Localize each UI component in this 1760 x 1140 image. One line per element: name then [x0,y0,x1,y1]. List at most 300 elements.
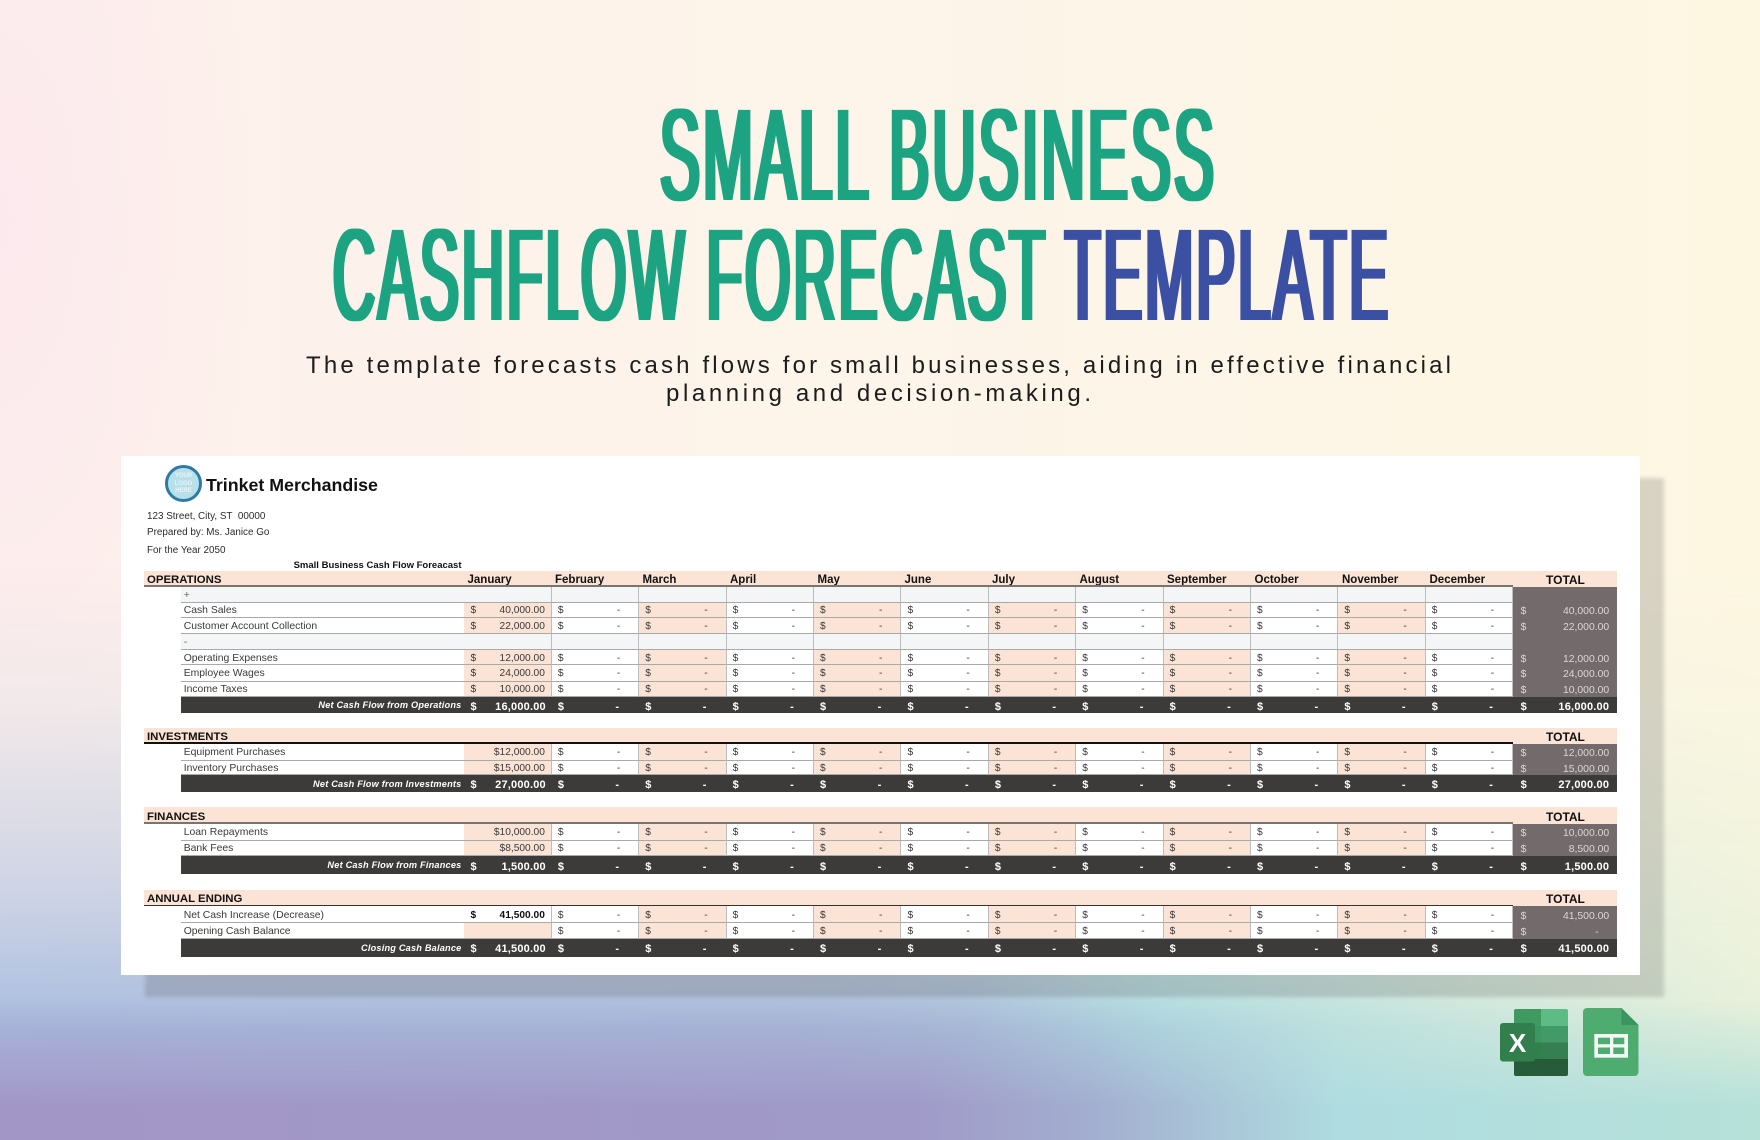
icon: excel: X [1509,1028,1527,1058]
row: income taxes: - [1403,684,1407,695]
icon: company logo: YOUR [175,473,192,479]
row: bank fees: $ [558,843,564,854]
row: income taxes: $ [558,684,564,695]
row: net cash flow from finances: $ [820,861,826,873]
operations header: November [1342,574,1398,586]
row: employee wages: $ [733,668,738,679]
row: inventory purchases: $ [1432,763,1437,774]
row: net cash flow from operations: $ [1082,701,1089,713]
row: closing cash balance: $ [1257,943,1263,955]
row: bank fees: - [1403,843,1407,854]
row: net cash flow from operations: - [1052,701,1056,713]
row: loan repayments: $10,000.00 [494,827,545,838]
investments header: INVESTMENTS [147,731,228,743]
row: net cash flow from finances: $ [1257,861,1263,873]
row: closing cash balance: $ [907,943,914,955]
row: loan repayments: - [792,827,795,838]
row: cash sales: Cash Sales [184,605,237,616]
row: operating expenses: - [617,653,620,664]
row: equipment purchases: $ [1432,747,1437,758]
row: bank fees: - [1054,843,1057,854]
row: equipment purchases: - [966,747,970,758]
row: bank fees: $ [1521,844,1526,855]
row: cash sales: $ [645,605,651,616]
row: net cash increase: - [1054,910,1057,921]
row: inventory purchases: Inventory Purchases [184,763,278,774]
icon: company logo: HERE [175,488,192,494]
row: equipment purchases: $ [1170,747,1175,758]
row: bank fees: $ [1432,843,1437,854]
row: operating expenses: $ [1432,653,1437,664]
row: loan repayments: $ [907,827,913,838]
row: opening cash balance: - [1491,926,1494,937]
row: closing cash balance: Closing Cash Balance [361,943,461,953]
operations header: September [1167,574,1226,586]
row: net cash flow from finances: - [1140,861,1144,873]
row: cash sales [181,603,1617,618]
row: net cash flow from operations: - [790,701,794,713]
row: net cash flow from finances: - [615,861,619,873]
row: loan repayments: $ [645,827,651,838]
row: inventory purchases: $15,000.00 [494,763,545,774]
row: net cash increase: $ [907,910,913,921]
row: cash sales: - [617,605,620,616]
row: net cash increase: 41,500.00 [1563,911,1609,922]
company name: Trinket Merchandise [206,475,378,495]
row: closing cash balance: $ [1521,943,1527,955]
row: opening cash balance: - [1054,926,1057,937]
row: inventory purchases: - [1054,763,1057,774]
row: cash sales: - [1316,605,1319,616]
row: net cash flow from investments: - [615,779,619,791]
row: opening cash balance: $ [1257,926,1263,937]
row: net cash flow from investments: $ [820,779,826,791]
row: loan repayments: $ [733,827,738,838]
panel: spreadsheet card [121,456,1640,975]
row: plus heading [181,587,1617,603]
row: net cash increase: - [1403,910,1407,921]
row: customer account collection: - [617,621,620,632]
finances header [144,807,1617,824]
row: income taxes: Income Taxes [184,684,248,695]
icon: google sheets [1583,1008,1638,1076]
row: net cash flow from operations: - [965,701,969,713]
row: net cash flow from finances: - [1052,861,1056,873]
row: loan repayments: - [1403,827,1407,838]
row: net cash increase: $ [1432,910,1437,921]
row: equipment purchases [181,744,1617,761]
row: cash sales: $ [995,605,1000,616]
row: income taxes: $ [1432,684,1437,695]
row: cash sales: $ [820,605,826,616]
row: inventory purchases: $ [820,763,826,774]
row: operating expenses: 12,000.00 [500,653,545,664]
row: cash sales: - [879,605,882,616]
row: income taxes: $ [1344,684,1350,695]
row: income taxes: $ [733,684,738,695]
row: bank fees: $ [907,843,913,854]
annual ending header: TOTAL [1546,892,1585,906]
row: minus heading [181,634,1617,650]
row: bank fees: - [792,843,795,854]
row: operating expenses: - [1491,653,1494,664]
row: customer account collection: $ [558,621,564,632]
row: net cash flow from investments: - [1402,779,1406,791]
row: closing cash balance: $ [995,943,1001,955]
row: customer account collection: - [966,621,970,632]
investments header: TOTAL [1546,730,1585,744]
row: opening cash balance: $ [907,926,913,937]
row: customer account collection: - [1491,621,1494,632]
row: opening cash balance: $ [645,926,651,937]
row: operating expenses: - [1403,653,1407,664]
row: employee wages: $ [1432,668,1437,679]
row: inventory purchases: - [1491,763,1494,774]
row: bank fees: 8,500.00 [1569,844,1609,855]
row: operating expenses: $ [470,653,476,664]
row: equipment purchases: - [1141,747,1145,758]
row: net cash increase: $ [1521,911,1526,922]
row: cash sales: - [1229,605,1232,616]
row: bank fees: $ [995,843,1000,854]
row: opening cash balance [181,923,1617,939]
row: income taxes: $ [1257,684,1263,695]
row: net cash flow from operations: Net Cash Flow from Operations [318,700,461,710]
row: bank fees: - [879,843,882,854]
row: net cash flow from investments: $ [1521,779,1527,791]
row: net cash flow from finances: $ [1432,861,1438,873]
row: inventory purchases: $ [907,763,913,774]
row: net cash flow from finances: $ [470,861,477,873]
row: operating expenses: - [1141,653,1145,664]
row: net cash flow from operations: $ [1344,701,1351,713]
row: net cash increase: - [792,910,795,921]
row: net cash flow from operations: 16,000.00 [1558,701,1609,713]
row: opening cash balance: - [1595,927,1599,938]
row: net cash increase: $ [1344,910,1350,921]
row: equipment purchases: $ [1257,747,1263,758]
row: net cash flow from finances: - [965,861,969,873]
row: net cash flow from investments: $ [907,779,914,791]
operations header: TOTAL [1546,573,1585,587]
operations header [144,571,1617,587]
row: income taxes [181,682,1617,697]
row: net cash flow from investments: - [790,779,794,791]
row: inventory purchases: - [1403,763,1407,774]
row: inventory purchases: $ [1257,763,1263,774]
row: cash sales: $ [1082,605,1088,616]
row: net cash flow from finances: - [878,861,881,873]
operations header: July [992,574,1015,586]
row: operating expenses: $ [820,653,826,664]
row: operating expenses: $ [1082,653,1088,664]
operations header: OPERATIONS [147,574,221,586]
row: operating expenses: $ [1170,653,1175,664]
address: 123 Street, City, ST 00000 [147,511,265,522]
annual ending header [144,890,1617,906]
row: inventory purchases: $ [1082,763,1088,774]
row: closing cash balance: $ [1170,943,1176,955]
row: bank fees: - [1229,843,1232,854]
row: equipment purchases: $ [1344,747,1350,758]
row: customer account collection: $ [470,621,476,632]
row: employee wages: - [966,668,970,679]
row: bank fees: $ [733,843,738,854]
row: net cash flow from operations: $ [820,701,826,713]
row: net cash flow from operations: $ [1257,701,1263,713]
row: cash sales: $ [907,605,913,616]
row: bank fees: - [1316,843,1319,854]
row: net cash flow from investments: $ [1170,779,1176,791]
row: net cash flow from finances: - [1489,861,1493,873]
row: closing cash balance: - [790,943,794,955]
row: operating expenses: $ [1257,653,1263,664]
row: net cash flow from investments: $ [1344,779,1351,791]
row: equipment purchases: - [879,747,882,758]
row: loan repayments: $ [820,827,826,838]
row: customer account collection: $ [820,621,826,632]
row: loan repayments: $ [1344,827,1350,838]
finances header: FINANCES [147,811,205,823]
row: opening cash balance: - [1403,926,1407,937]
row: customer account collection: $ [733,621,738,632]
row: loan repayments: 10,000.00 [1563,828,1609,839]
row: opening cash balance: - [1229,926,1232,937]
row: closing cash balance: $ [820,943,826,955]
row: employee wages [181,665,1617,682]
row: net cash flow from finances: $ [1521,861,1527,873]
row: cash sales: 40,000.00 [500,605,545,616]
row: closing cash balance: $ [470,943,477,955]
row: net cash flow from operations: $ [995,701,1001,713]
row: closing cash balance: - [703,943,707,955]
row: net cash flow from finances: $ [1344,861,1351,873]
row: operating expenses: - [1316,653,1319,664]
row: net cash flow from investments: $ [1257,779,1263,791]
row: closing cash balance: $ [558,943,564,955]
row: operating expenses [181,650,1617,665]
row: equipment purchases: 12,000.00 [1563,748,1609,759]
sheet title: Small Business Cash Flow Foreacast [294,560,462,571]
row: cash sales: - [1491,605,1494,616]
row: loan repayments: $ [558,827,564,838]
row: closing cash balance: 41,500.00 [495,943,546,955]
row: opening cash balance: $ [558,926,564,937]
row: inventory purchases: $ [1170,763,1175,774]
operations header: December [1430,574,1485,586]
row: net cash flow from investments: - [1227,779,1231,791]
operations header: May [818,574,840,586]
row: closing cash balance [181,939,1617,957]
row: closing cash balance: - [1227,943,1231,955]
row: income taxes: $ [1082,684,1088,695]
row: employee wages: - [879,668,882,679]
row: equipment purchases: - [792,747,795,758]
row: net cash flow from finances: 1,500.00 [501,861,546,873]
row: opening cash balance: - [1316,926,1319,937]
row: inventory purchases: - [792,763,795,774]
row: net cash flow from operations: $ [1521,701,1527,713]
row: customer account collection: $ [1344,621,1350,632]
row: net cash flow from operations: - [1315,701,1318,713]
row: operating expenses: - [704,653,708,664]
row: net cash flow from operations: $ [645,701,652,713]
prepared by: Prepared by: Ms. Janice Go [147,527,269,538]
row: employee wages: - [1316,668,1319,679]
row: net cash flow from investments: 27,000.00 [1558,779,1609,791]
row: equipment purchases: $ [820,747,826,758]
operations header: April [730,574,756,586]
row: bank fees: - [1141,843,1145,854]
row: customer account collection: - [1054,621,1057,632]
row: net cash flow from investments: $ [470,779,477,791]
row: employee wages: $ [1344,668,1350,679]
row: income taxes: - [879,684,882,695]
row: employee wages: $ [907,668,913,679]
row: net cash flow from finances: - [1402,861,1406,873]
row: customer account collection: $ [995,621,1000,632]
row: net cash increase: $ [1170,910,1175,921]
row: inventory purchases: $ [995,763,1000,774]
row: inventory purchases [181,761,1617,775]
row: loan repayments: - [1491,827,1494,838]
row: net cash flow from investments: $ [1082,779,1089,791]
row: inventory purchases: $ [1521,764,1526,775]
operations header: June [904,574,931,586]
row: income taxes: $ [995,684,1000,695]
row: customer account collection: - [879,621,882,632]
operations header: February [555,574,604,586]
row: operating expenses: 12,000.00 [1563,654,1609,665]
row: equipment purchases: $ [558,747,564,758]
row: income taxes: 10,000.00 [500,684,545,695]
row: bank fees: $ [1344,843,1350,854]
row: closing cash balance: $ [1082,943,1089,955]
finances header: TOTAL [1546,810,1585,824]
row: loan repayments: $ [1521,828,1526,839]
row: cash sales: $ [470,605,476,616]
year: For the Year 2050 [147,544,226,556]
row: opening cash balance: $ [995,926,1000,937]
row: loan repayments: $ [1170,827,1175,838]
row: income taxes: $ [470,684,476,695]
row: opening cash balance: $ [1344,926,1350,937]
row: net cash flow from investments: - [703,779,707,791]
row: customer account collection: $ [1432,621,1437,632]
row: bank fees: - [617,843,620,854]
row: employee wages: - [617,668,620,679]
row: equipment purchases: - [1229,747,1232,758]
row: loan repayments: - [966,827,970,838]
row: net cash flow from investments: - [965,779,969,791]
row: operating expenses: $ [733,653,738,664]
row: income taxes: $ [645,684,651,695]
row: net cash flow from investments: $ [995,779,1001,791]
row: net cash flow from finances [181,856,1617,874]
row: net cash flow from operations: - [1227,701,1231,713]
row: loan repayments [181,824,1617,841]
icon: company logo [165,465,202,502]
row: inventory purchases: $ [558,763,564,774]
row: inventory purchases: $ [733,763,738,774]
row: bank fees: - [966,843,970,854]
row: opening cash balance: - [879,926,882,937]
row: operating expenses: $ [1521,654,1526,665]
row: loan repayments: $ [1257,827,1263,838]
row: customer account collection: $ [645,621,651,632]
row: net cash flow from investments: $ [558,779,564,791]
row: employee wages: $ [645,668,651,679]
row: customer account collection: - [704,621,708,632]
row: opening cash balance: - [792,926,795,937]
row: net cash flow from finances: $ [995,861,1001,873]
row: net cash flow from operations: $ [1170,701,1176,713]
row: net cash flow from finances: - [790,861,794,873]
row: net cash flow from finances: $ [1082,861,1089,873]
row: employee wages: $ [558,668,564,679]
row: income taxes: $ [1521,685,1526,696]
row: net cash flow from investments: - [1315,779,1318,791]
row: income taxes: - [1229,684,1232,695]
row: operating expenses: $ [558,653,564,664]
row: operating expenses: $ [995,653,1000,664]
row: net cash increase: $ [733,910,738,921]
row: customer account collection: $ [1521,622,1526,633]
row: net cash flow from finances: $ [558,861,564,873]
row: inventory purchases: - [1229,763,1232,774]
icon: company logo: LOGO [175,480,192,486]
row: cash sales: $ [1344,605,1350,616]
title [306,81,1451,407]
row: net cash flow from finances: - [1315,861,1318,873]
row: net cash flow from operations: - [703,701,707,713]
row: net cash flow from operations: - [615,701,619,713]
row: bank fees: $ [1082,843,1088,854]
row: equipment purchases: $ [995,747,1000,758]
subtitle line 1: The template forecasts cash flows for small businesses, aiding in effective financial [306,352,1451,379]
row: opening cash balance: $ [1521,927,1526,938]
row: employee wages: - [1229,668,1232,679]
row: employee wages: $ [1082,668,1088,679]
row: bank fees: $ [1257,843,1263,854]
row: equipment purchases: $ [907,747,913,758]
row: loan repayments: - [617,827,620,838]
annual ending header: ANNUAL ENDING [147,893,242,905]
row: cash sales: $ [1257,605,1263,616]
row: net cash flow from finances: Net Cash Flow from Finances [327,860,461,870]
row: net cash increase: $ [645,910,651,921]
operations header: January [468,574,512,586]
row: equipment purchases: Equipment Purchases [184,747,285,758]
row: closing cash balance: - [1402,943,1406,955]
row: net cash flow from finances: $ [1170,861,1176,873]
row: net cash flow from finances: - [1227,861,1231,873]
row: cash sales: $ [558,605,564,616]
row: net cash increase: - [1316,910,1319,921]
row: net cash flow from investments: 27,000.00 [495,779,546,791]
row: loan repayments: - [1316,827,1319,838]
operations header: October [1254,574,1299,586]
row: opening cash balance: - [966,926,970,937]
row: customer account collection: - [1316,621,1319,632]
row: bank fees: Bank Fees [184,843,233,854]
row: inventory purchases: - [879,763,882,774]
investments header [144,728,1617,744]
row: net cash increase: - [966,910,970,921]
row: opening cash balance: Opening Cash Balance [184,926,291,937]
row: net cash flow from investments: - [1489,779,1493,791]
row: closing cash balance: - [1489,943,1493,955]
